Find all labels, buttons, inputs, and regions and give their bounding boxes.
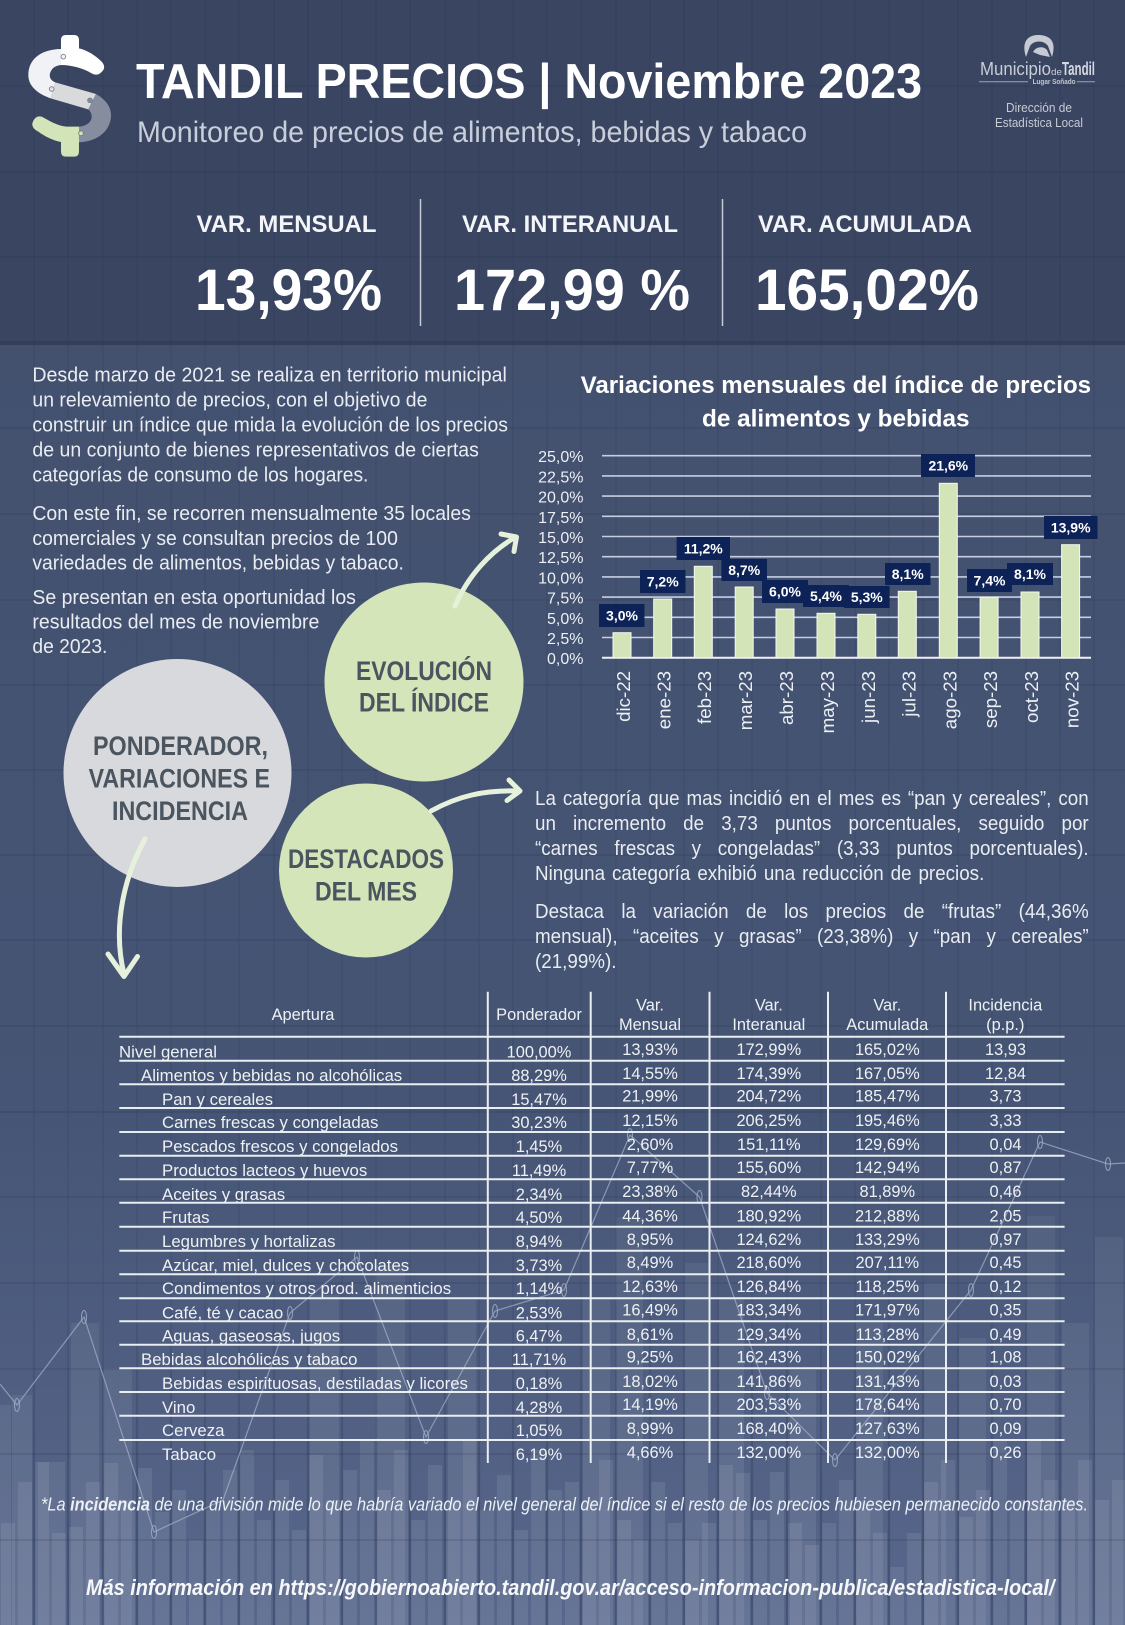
table: var acumulada column: 142,94% [855,1159,920,1177]
table: var interanual column: 151,11% [737,1136,801,1154]
table: ponderador column: 1,45% [516,1138,562,1156]
table: var acumulada column: 165,02% [855,1041,920,1059]
table: var acumulada column: 207,11% [856,1254,919,1272]
table: ponderador column: 2,53% [516,1304,562,1322]
table: var interanual column: 162,43% [736,1349,801,1367]
chart title: de alimentos y bebidas [702,406,970,433]
table: ponderador column: 4,50% [516,1209,562,1227]
value labels: 11,2% [684,540,723,556]
table: var acumulada column: 150,02% [855,1349,920,1367]
table: ponderador column: 88,29% [511,1067,567,1085]
value labels: 21,6% [928,458,969,474]
value labels: 7,2% [647,574,679,590]
table: var mensual column: 13,93% [622,1041,678,1059]
table: var interanual column: 203,53% [736,1396,801,1414]
KPI: variacion interanual: VAR. INTERANUAL [462,211,678,238]
y axis labels: 7,5% [547,591,584,608]
table: var interanual column: 132,00% [736,1444,801,1462]
table: var mensual column: 16,49% [622,1302,678,1320]
table: var interanual column: 82,44% [741,1183,797,1201]
y axis labels: 22,5% [538,469,584,486]
table: incidencia column: 0,35 [990,1302,1021,1320]
table: incidencia column: 2,05 [990,1207,1021,1225]
y axis labels: 15,0% [538,530,584,547]
y axis labels: 2,5% [547,631,584,648]
table: var mensual column: 12,63% [622,1278,678,1296]
table: var acumulada column: 167,05% [855,1065,920,1083]
table: var mensual column: 23,38% [622,1183,678,1201]
x axis labels: jul-23 [898,671,920,718]
table: incidencia column [985,1041,1026,1462]
table header: Var. [755,997,783,1015]
table: ponderador column: 11,49% [512,1162,566,1180]
text block: highlights of the month: Ninguna categoría exhibió una reducción de precios. [535,863,985,885]
table: category names: Vino [162,1398,195,1417]
arrow: destacados to text [431,780,520,811]
table: var interanual column: 180,92% [736,1207,801,1225]
logo caption: Dirección de [1006,101,1072,115]
circle: destacados del mes [279,784,453,958]
y axis labels: 20,0% [538,490,584,507]
circle: destacados del mes: DEL MES [315,877,417,907]
table: var interanual column: 126,84% [736,1278,801,1296]
table header: Ponderador [496,1006,582,1024]
table header: Var. [636,997,664,1015]
table: incidencia column: 12,84 [985,1065,1026,1083]
table: ponderador column: 100,00% [507,1043,571,1061]
table: category names: Nivel general [119,1042,217,1061]
x axis labels: mar-23 [735,671,756,730]
table: incidencia column: 0,12 [990,1278,1021,1296]
y axis labels: 0,0% [547,651,584,668]
y axis labels: 12,5% [538,550,584,567]
KPI: variacion acumulada: 165,02% [755,258,979,323]
table: var mensual column: 14,19% [622,1396,678,1414]
table: var mensual column: 44,36% [622,1207,678,1225]
chart title [581,372,1091,433]
text block: highlights of the month: mensual), “aceites y grasas” (23,38%) y “pan y cereales” [535,926,1089,948]
table: var acumulada column: 129,69% [855,1136,920,1154]
table: category names: Productos lacteos y huevos [162,1161,367,1180]
bar chart: monthly variations [538,449,1098,733]
value labels: 3,0% [606,608,639,624]
table: var interanual column: 218,60% [736,1254,801,1272]
table: var interanual column: 168,40% [736,1420,801,1438]
table: category names: Aguas, gaseosas, jugos [162,1327,340,1346]
table: ponderador column: 3,73% [516,1257,562,1275]
table: var interanual column: 183,34% [736,1302,801,1320]
table: var interanual column: 129,34% [736,1326,801,1344]
circle: ponderador, variaciones e incidencia: VARIACIONES E [89,764,270,794]
table: ponderador, variaciones e incidencia [119,992,1065,1464]
x axis labels: sep-23 [980,671,1001,728]
text block: introduction: Se presentan en esta oportunidad los [32,587,356,609]
KPI: variacion interanual: 172,99 % [454,258,690,323]
table: var mensual column: 8,49% [627,1254,673,1272]
table: incidencia column: 0,97 [990,1231,1021,1249]
table header: Incidencia [968,997,1043,1015]
text block: highlights of the month: Destaca la variación de los precios de “frutas” (44,36% [535,901,1089,923]
table: ponderador column: 0,18% [516,1375,562,1393]
x axis labels: oct-23 [1021,671,1042,723]
x axis labels: dic-22 [613,671,634,722]
table header: Acumulada [846,1016,929,1034]
table: var acumulada column: 185,47% [855,1088,920,1106]
subtitle: Monitoreo de precios de alimentos, bebidas y tabaco [137,116,807,149]
text block: introduction: Desde marzo de 2021 se realiza en territorio municipal [32,364,507,386]
table: category names: Cerveza [162,1421,225,1440]
table: var mensual column: 8,61% [627,1326,673,1344]
table: ponderador column: 4,28% [516,1399,562,1417]
y axis labels: 10,0% [538,570,584,587]
circle: ponderador, variaciones e incidencia [64,659,292,887]
table: ponderador column [507,1043,571,1464]
table: var acumulada column: 118,25% [856,1278,919,1296]
table: incidencia column: 3,33 [990,1112,1021,1130]
text block: introduction: de 2023. [32,636,107,658]
value labels [599,454,1098,627]
chart title: Variaciones mensuales del índice de precios [581,372,1091,399]
table: var interanual column [736,1041,801,1462]
circle: evolucion del indice: EVOLUCIÓN [356,655,492,686]
table: incidencia column: 0,09 [990,1420,1021,1438]
text block: introduction: comerciales y se consultan precios de 100 [32,528,398,550]
table header [272,997,1043,1034]
text block: highlights of the month: “carnes frescas y congeladas” (3,33 puntos porcentuales). [535,838,1089,860]
x axis labels: feb-23 [694,671,715,724]
table: var interanual column: 155,60% [736,1159,801,1177]
value labels: 6,0% [769,584,802,600]
table: var mensual column: 8,99% [627,1420,673,1438]
table: category names: Carnes frescas y congeladas [162,1113,378,1132]
table: category names: Condimentos y otros prod. alimenticios [162,1279,451,1298]
arrow: evolucion to chart [455,534,516,606]
table: category names: Azúcar, miel, dulces y chocolates [162,1256,409,1275]
y axis labels: 5,0% [547,611,584,628]
logo caption: Estadística Local [995,116,1083,130]
text block: introduction: categorías de consumo de los hogares. [32,464,368,486]
x axis labels: nov-23 [1062,671,1082,728]
x axis labels: ago-23 [940,671,960,729]
table: ponderador column: 15,47% [511,1091,567,1109]
table: var acumulada column: 127,63% [855,1420,920,1438]
KPI: variacion acumulada [755,211,979,323]
table: category names: Legumbres y hortalizas [162,1232,336,1251]
table: var interanual column: 172,99% [736,1041,801,1059]
table: var interanual column: 204,72% [736,1088,801,1106]
circle: ponderador, variaciones e incidencia: PONDERADOR, [93,731,268,761]
arrow: ponderador to table [108,839,145,976]
table: incidencia column: 0,49 [990,1326,1021,1344]
table: category names: Tabaco [162,1445,216,1464]
table: ponderador column: 6,19% [516,1446,562,1464]
text block: introduction: resultados del mes de noviembre [32,612,319,634]
table: ponderador column: 30,23% [511,1114,567,1132]
table: var interanual column: 206,25% [736,1112,801,1130]
table: incidencia column: 0,46 [990,1183,1021,1201]
table: category names [119,1042,468,1464]
table: incidencia column: 0,70 [990,1396,1021,1414]
table: category names: Bebidas espirituosas, destiladas y licores [162,1374,468,1393]
value labels: 13,9% [1051,520,1091,536]
table: var mensual column: 18,02% [622,1373,678,1391]
table: incidencia column: 0,45 [990,1254,1021,1272]
value labels: 8,1% [892,566,924,582]
logo: Municipio de Tandil: Tandil [1062,59,1095,79]
table header: Apertura [272,1006,335,1024]
circle: destacados del mes: DESTACADOS [288,844,444,874]
table: incidencia column: 13,93 [985,1041,1026,1059]
text block: introduction [32,364,508,658]
table header: Mensual [619,1016,681,1034]
table: var acumulada column: 178,64% [855,1396,920,1414]
table: var mensual column: 21,99% [622,1088,678,1106]
text block: highlights of the month: (21,99%). [535,951,617,973]
logo: Municipio de Tandil [979,35,1095,86]
text block: highlights of the month: un incremento de 3,73 puntos porcentuales, seguido por [535,813,1089,835]
table: category names: Bebidas alcohólicas y tabaco [141,1350,357,1369]
y axis labels: 17,5% [538,510,584,527]
table: category names: Aceites y grasas [162,1185,285,1204]
logo: Municipio de Tandil: de [1051,67,1062,77]
table: category names: Alimentos y bebidas no alcohólicas [141,1066,402,1085]
table header: (p.p.) [986,1016,1024,1034]
text block: highlights of the month [535,788,1089,973]
table: category names: Café, té y cacao [162,1303,283,1322]
table: incidencia column: 0,03 [990,1373,1021,1391]
x axis labels [613,671,1082,733]
table: var mensual column: 9,25% [627,1349,673,1367]
x axis labels: abr-23 [776,671,797,725]
value labels: 8,7% [728,562,761,578]
value labels: 5,3% [851,589,883,605]
text block: introduction: un relevamiento de precios, con el objetivo de [32,389,427,411]
circle: evolucion del indice: DEL ÍNDICE [359,687,489,718]
table: ponderador column: 1,14% [516,1280,562,1298]
value labels: 5,4% [810,588,843,604]
logo caption [995,101,1083,130]
table: ponderador column: 6,47% [516,1328,562,1346]
table: incidencia column: 0,87 [990,1159,1021,1177]
value labels: 7,4% [974,572,1006,588]
text block: highlights of the month: La categoría que mas incidió en el mes es “pan y cereales”, con [535,788,1089,810]
x axis labels: may-23 [817,671,838,733]
table: var acumulada column [855,1041,920,1462]
text block: introduction: de un conjunto de bienes representativos de ciertas [32,439,479,461]
logo: Municipio de Tandil: Lugar Soñado [1033,79,1076,86]
table: incidencia column: 1,08 [990,1349,1021,1367]
table: var mensual column: 2,60% [627,1136,673,1154]
title: TANDIL PRECIOS | Noviembre 2023 [136,55,922,109]
value labels: 8,1% [1014,566,1047,582]
table: var mensual column: 4,66% [627,1444,673,1462]
KPI: variacion acumulada: VAR. ACUMULADA [758,211,972,238]
circle: ponderador, variaciones e incidencia: INCIDENCIA [112,796,248,826]
table header: Interanual [732,1016,805,1034]
bars [613,483,1080,658]
table: ponderador column: 8,94% [516,1233,562,1251]
table: incidencia column: 0,04 [990,1136,1021,1154]
KPI: variacion mensual [195,211,382,323]
table: var acumulada column: 132,00% [855,1444,920,1462]
table: var interanual column: 174,39% [736,1065,801,1083]
table: var mensual column: 7,77% [627,1159,673,1177]
logo: Municipio de Tandil: Municipio [980,59,1051,79]
KPI: variacion mensual: VAR. MENSUAL [196,211,376,238]
text block: introduction: construir un índice que mida la evolución de los precios [32,414,508,436]
table header: Var. [873,997,901,1015]
table: category names: Pescados frescos y congelados [162,1137,398,1156]
text block: introduction: Con este fin, se recorren mensualmente 35 locales [32,503,471,525]
table: ponderador column: 11,71% [512,1351,566,1369]
table: var mensual column: 14,55% [622,1065,678,1083]
table: var mensual column: 12,15% [622,1112,678,1130]
table: var mensual column [622,1041,678,1462]
x axis labels: jun-23 [858,671,879,724]
footer link: Más información en https://gobiernoabierto.tandil.gov.ar/acceso-informacion-publica/estadistica-local/ [86,1575,1057,1600]
x axis labels: ene-23 [654,671,674,729]
KPI: variacion mensual: 13,93% [195,258,382,323]
table: incidencia column: 3,73 [990,1088,1021,1106]
circle: evolucion del indice [324,582,524,782]
table: var interanual column: 124,62% [736,1231,801,1249]
table: incidencia column: 0,26 [990,1444,1021,1462]
table: category names: Frutas [162,1208,210,1227]
KPI: variacion interanual [454,211,690,323]
y axis labels [538,449,584,668]
table: var acumulada column: 133,29% [855,1231,920,1249]
table: var mensual column: 8,95% [627,1231,673,1249]
text block: introduction: variedades de alimentos, bebidas y tabaco. [32,552,404,574]
table: var acumulada column: 212,88% [855,1207,920,1225]
table: var acumulada column: 81,89% [860,1183,915,1201]
icon: dollar sign puzzle [28,35,111,157]
table: var acumulada column: 113,28% [856,1326,919,1344]
table: category names: Pan y cereales [162,1090,273,1109]
table: ponderador column: 1,05% [516,1422,562,1440]
table: var acumulada column: 171,97% [855,1302,920,1320]
table: ponderador column: 2,34% [516,1186,562,1204]
table: var interanual column: 141,86% [736,1373,801,1391]
table: var acumulada column: 195,46% [855,1112,920,1130]
y axis labels: 25,0% [538,449,584,466]
table: var acumulada column: 131,43% [855,1373,920,1391]
